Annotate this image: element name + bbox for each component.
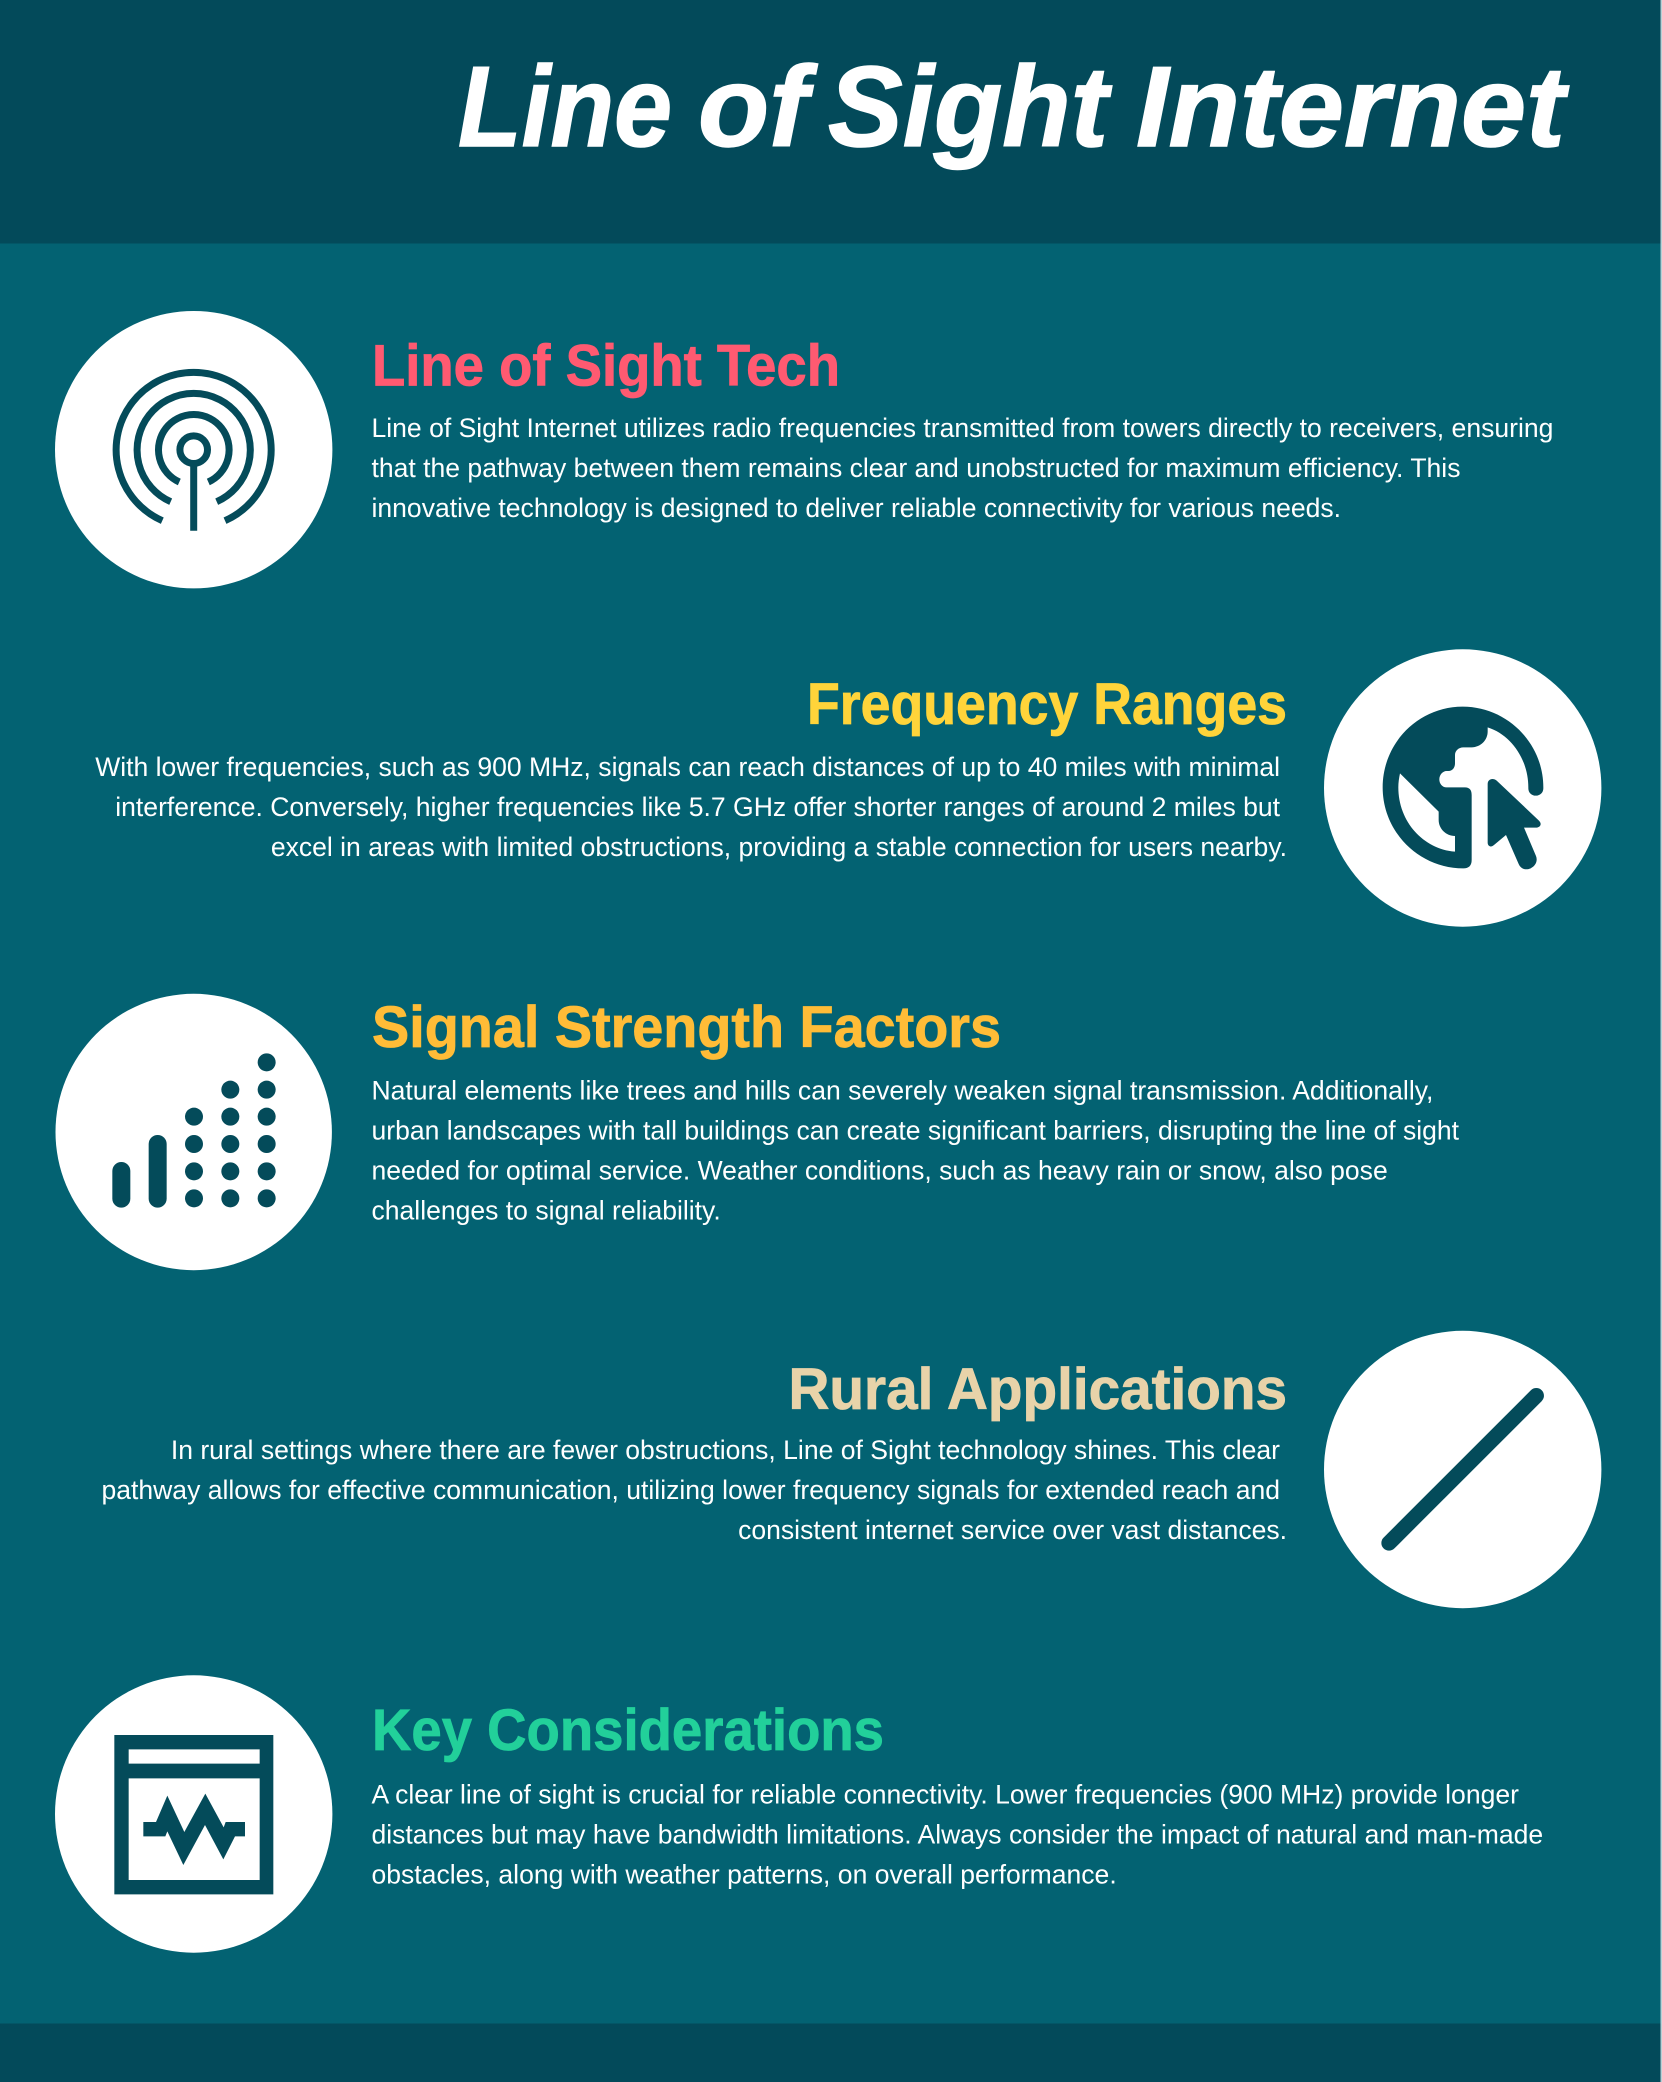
text block: key considerations: A clear line of sight is crucial for reliable connectivity. Lower frequencies (900 MHz) provide longer bbox=[372, 1779, 1519, 1809]
icon: browser window with pulse bbox=[55, 1675, 332, 1953]
text block: frequency ranges: With lower frequencies, such as 900 MHz, signals can reach distances of up to 40 miles with minimal bbox=[95, 752, 1280, 782]
heading: rural applications: Rural Applications bbox=[788, 1357, 1287, 1422]
text block: frequency ranges: excel in areas with limited obstructions, providing a stable connection for users nearby. bbox=[271, 832, 1287, 862]
text block: line of sight tech: Line of Sight Internet utilizes radio frequencies transmitted from towers directly to receivers, ensuring bbox=[372, 413, 1553, 443]
title bbox=[458, 44, 1569, 171]
text block: signal strength factors: challenges to signal reliability. bbox=[372, 1195, 721, 1225]
icon: globe with cursor bbox=[1324, 649, 1601, 927]
text block: signal strength factors: urban landscapes with tall buildings can create significant barriers, disrupting the line of sight bbox=[372, 1115, 1460, 1145]
panel: frequency ranges bbox=[95, 649, 1601, 927]
text block: signal strength factors: needed for optimal service. Weather conditions, such as heavy rain or snow, also pose bbox=[372, 1155, 1388, 1185]
panel: line of sight tech bbox=[55, 311, 1553, 588]
panel: rural applications bbox=[101, 1331, 1601, 1608]
heading: key considerations: Key Considerations bbox=[372, 1698, 884, 1763]
title: Internet bbox=[1136, 44, 1569, 171]
title: of bbox=[698, 44, 818, 171]
heading: signal strength factors: Signal Strength Factors bbox=[372, 995, 1001, 1060]
text block: signal strength factors: Natural elements like trees and hills can severely weaken signal transmission. Additionally, bbox=[372, 1075, 1433, 1105]
heading: line of sight tech: Line of Sight Tech bbox=[372, 334, 840, 398]
panel: signal strength factors bbox=[56, 994, 1460, 1270]
text block: line of sight tech: innovative technology is designed to deliver reliable connectivity for various needs. bbox=[372, 493, 1341, 523]
footer band bbox=[0, 2024, 1662, 2082]
icon: diagonal line of sight bbox=[1324, 1331, 1601, 1608]
text block: frequency ranges: interference. Conversely, higher frequencies like 5.7 GHz offer shorter ranges of around 2 miles but bbox=[115, 792, 1281, 822]
text block: line of sight tech bbox=[372, 413, 1553, 523]
text block: key considerations: distances but may have bandwidth limitations. Always consider the impact of natural and man-made bbox=[372, 1819, 1543, 1849]
panel: key considerations bbox=[55, 1675, 1543, 1953]
text block: key considerations bbox=[372, 1779, 1543, 1889]
text block: signal strength factors bbox=[372, 1075, 1460, 1225]
text block: frequency ranges bbox=[95, 752, 1287, 862]
icon: signal bars and dots bbox=[56, 994, 332, 1270]
text block: line of sight tech: that the pathway between them remains clear and unobstructed for maximum efficiency. This bbox=[372, 453, 1460, 483]
title: Sight bbox=[828, 44, 1112, 171]
text block: key considerations: obstacles, along with weather patterns, on overall performance. bbox=[372, 1859, 1117, 1889]
text block: rural applications: In rural settings where there are fewer obstructions, Line of Sight technology shines. This clear bbox=[171, 1435, 1280, 1465]
text block: rural applications bbox=[101, 1435, 1287, 1545]
title: Line bbox=[458, 44, 672, 171]
header band bbox=[0, 0, 1662, 244]
icon: broadcast antenna bbox=[55, 311, 332, 588]
text block: rural applications: pathway allows for effective communication, utilizing lower frequency signals for extended reach and bbox=[101, 1475, 1280, 1505]
text block: rural applications: consistent internet service over vast distances. bbox=[738, 1515, 1287, 1545]
heading: frequency ranges: Frequency Ranges bbox=[807, 672, 1287, 737]
